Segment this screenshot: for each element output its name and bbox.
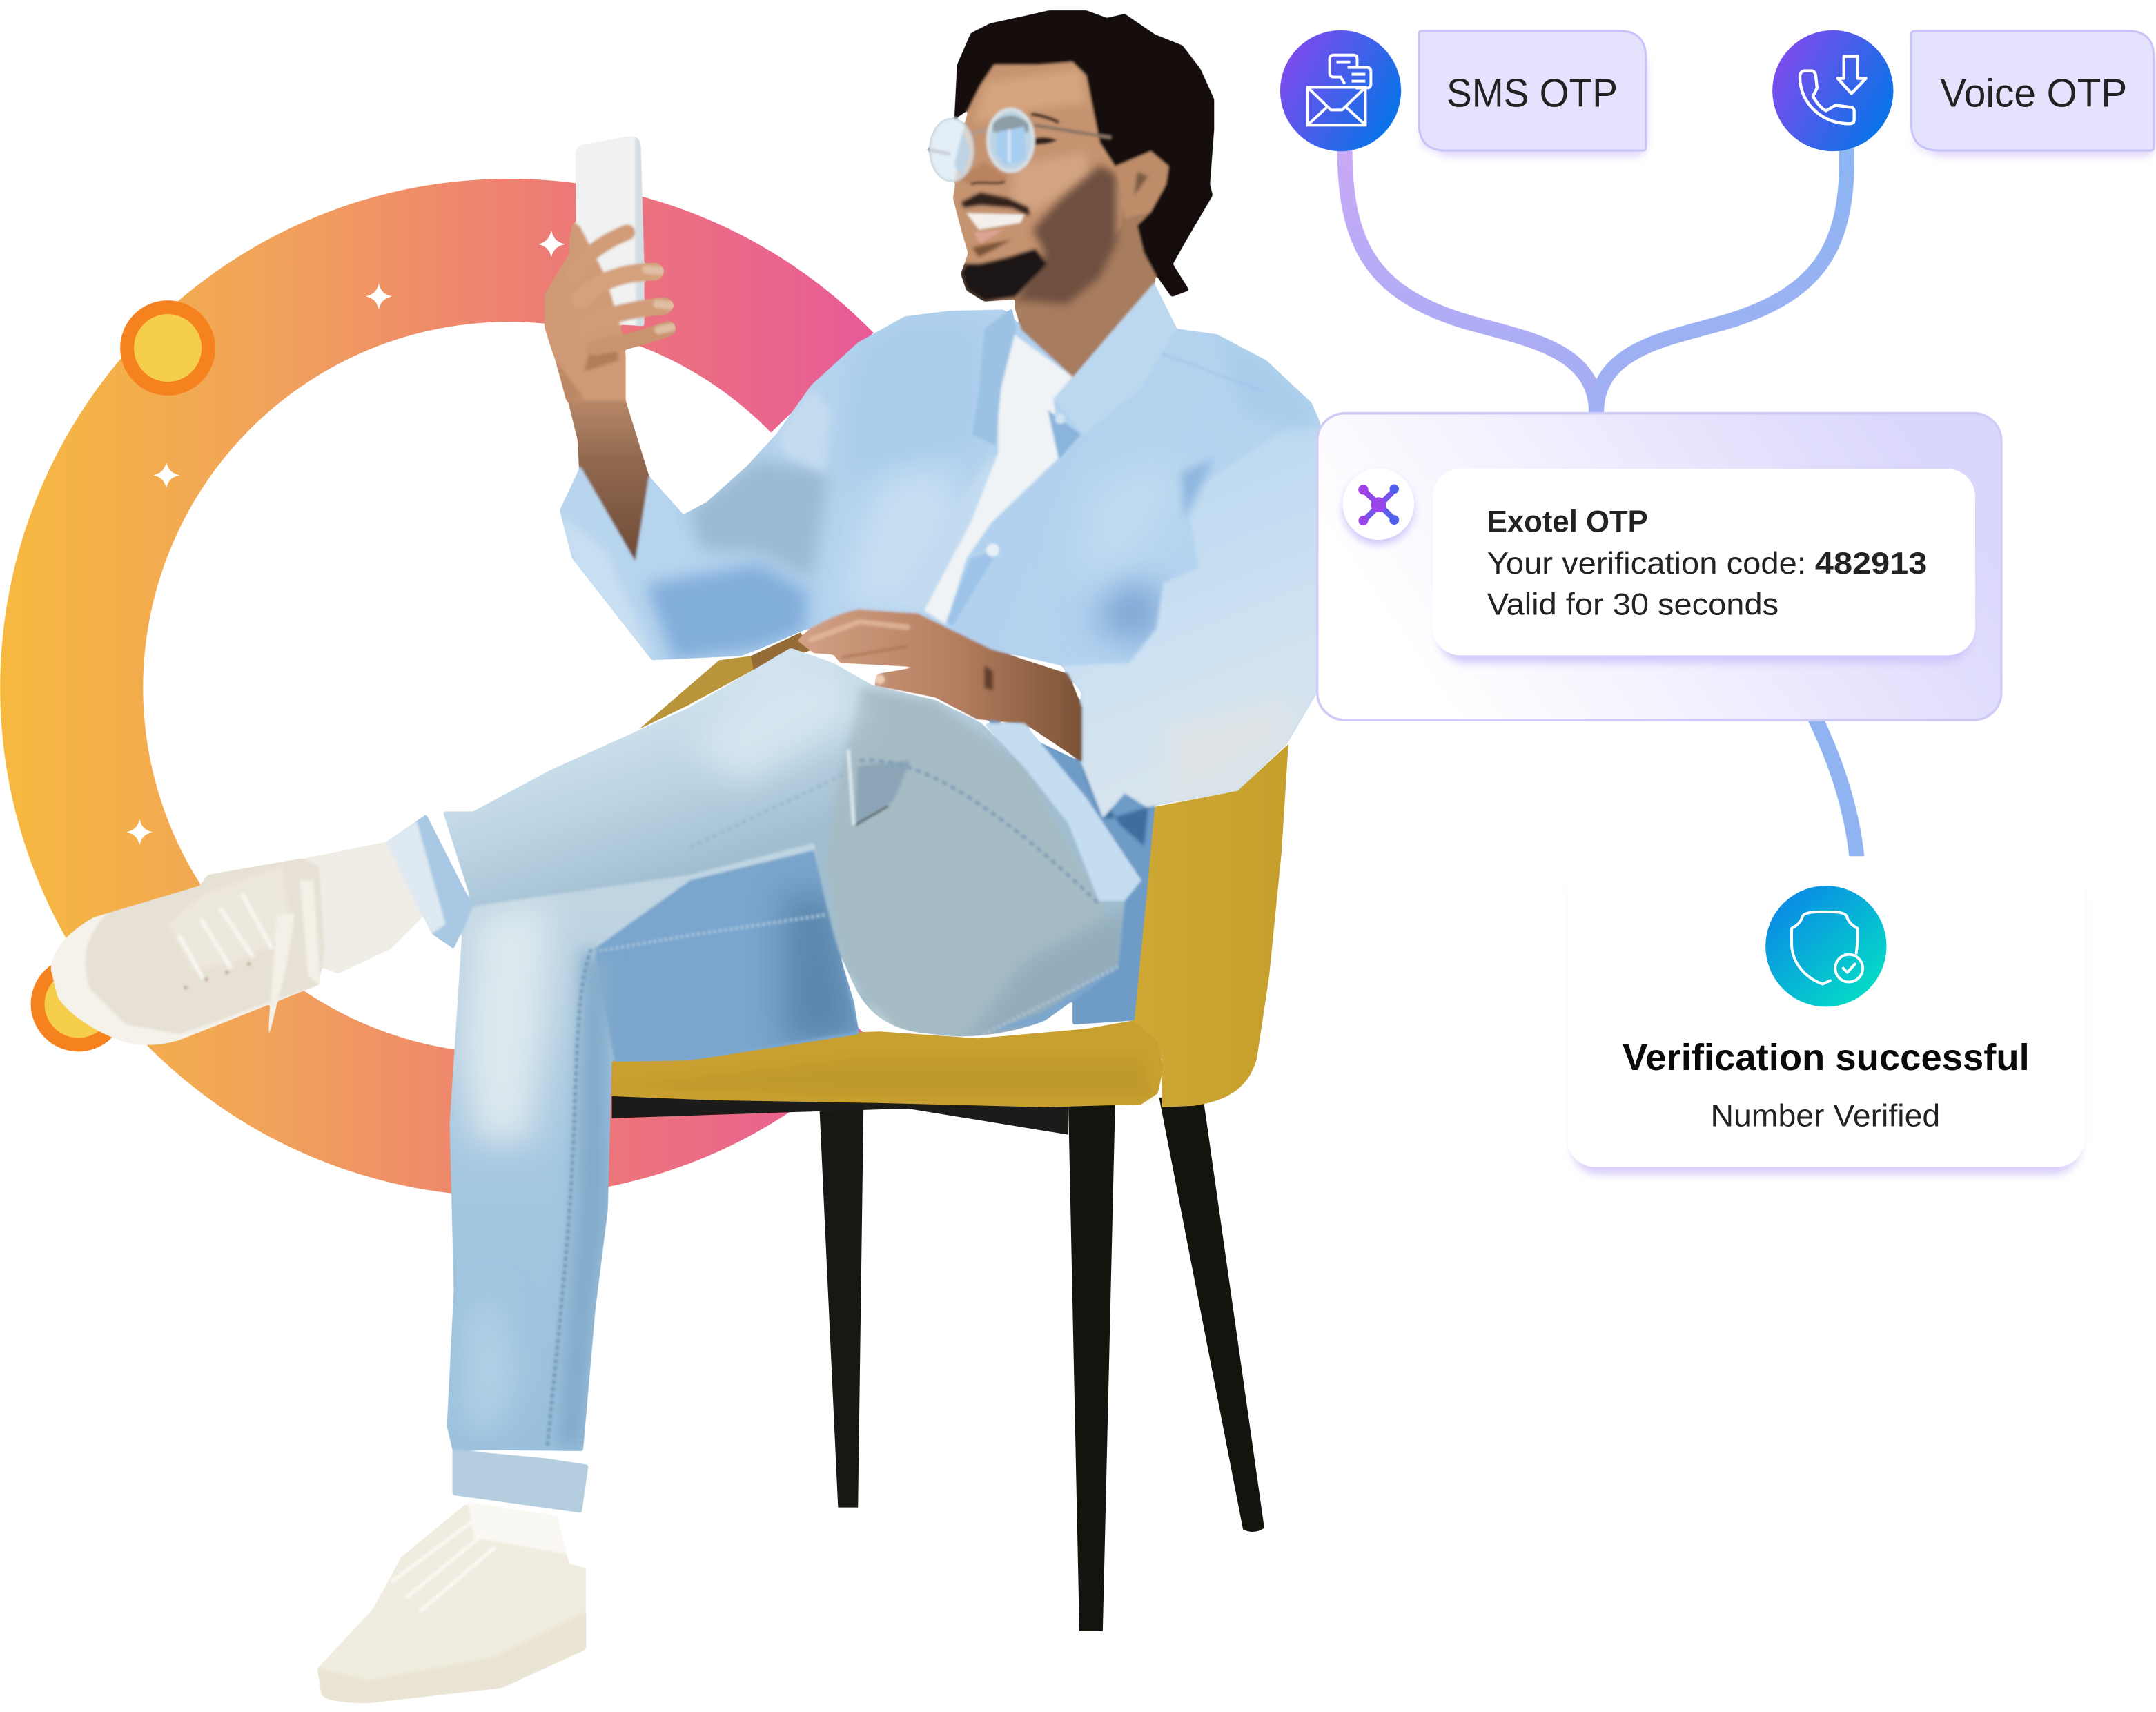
sock [305,842,422,974]
panel: verification result: Number Verified [1710,1098,1940,1134]
message card [1433,469,1975,655]
raised hand [545,222,671,402]
sparkles [126,231,565,845]
white t-shirt [924,333,1072,625]
label: Voice OTP: Voice OTP [1940,71,2127,115]
collar loop [1048,410,1081,459]
message card shadow [1438,484,1972,663]
ring marker: top [127,307,208,389]
chair leg: back right [1159,1098,1264,1532]
panel: verification result [1567,856,2084,1174]
standing shoe [317,1502,586,1703]
message card: 482913 [1815,546,1927,581]
neck [1015,165,1162,377]
label: SMS OTP [1419,31,1647,157]
vertical leg jeans [447,843,861,1451]
forearm raised [564,355,649,568]
chair leg: front left [819,1109,863,1508]
goatee [961,249,1046,301]
panel: verification result: Verification successful [1623,1037,2030,1078]
mouth [967,213,1024,257]
eye and brow [1031,114,1059,145]
message card: Your verification code: [1487,546,1806,581]
chair leg: front centre [1068,1105,1115,1631]
shirt tail and jeans behind thigh [985,715,1155,1024]
shirt placket [946,550,998,626]
jeans cuff: vertical leg [452,1450,589,1513]
shirt collar right [1053,282,1177,435]
jeans cuff: crossed leg [386,814,473,949]
label: SMS OTP: SMS OTP [1447,71,1618,115]
chair seat [612,1020,1164,1107]
phone [576,136,644,326]
man [51,10,1320,1703]
icon: shield check [1765,886,1887,1006]
chair backrest [1133,744,1288,1107]
icon: Voice [1772,30,1893,151]
left placket [917,456,994,607]
chair rail [612,1095,1068,1135]
label: Voice OTP [1911,31,2156,157]
left sleeve shading [687,459,829,579]
connector: SMS to message panel [1345,148,1596,413]
stubble beard [1015,165,1117,304]
chair back top edge [639,632,814,729]
chair [612,632,1288,1631]
glasses [927,109,1111,182]
connector: message panel to result card [1815,718,1857,858]
raised shoe [51,842,422,1045]
collar button [1055,414,1066,424]
shoe lace [268,880,320,1041]
nose line [971,182,1005,184]
dark jeans: under crossed leg [585,850,859,1062]
message card: Exotel OTP [1487,505,1648,539]
right sleeve [1061,428,1320,818]
collar inner left [972,308,1016,446]
ear [1115,151,1168,219]
front left panel [855,327,957,468]
hand on knee [798,610,1082,762]
icon: Exotel logo [1343,468,1414,540]
message card: Valid for 30 seconds [1487,587,1778,622]
face [953,62,1128,301]
logo shadow [1343,473,1414,545]
right torso shade [1090,575,1165,649]
ring marker: bottom [38,963,119,1044]
hair [954,10,1214,297]
icon: SMS [1280,30,1401,151]
decorative gradient ring [0,179,874,1196]
crossed leg jeans [386,648,1135,1045]
panel: OTP message [1317,414,2001,720]
mustache [961,193,1030,216]
shirt button [986,543,999,557]
shirt body [560,282,1320,818]
connector: Voice to message panel [1596,148,1847,413]
